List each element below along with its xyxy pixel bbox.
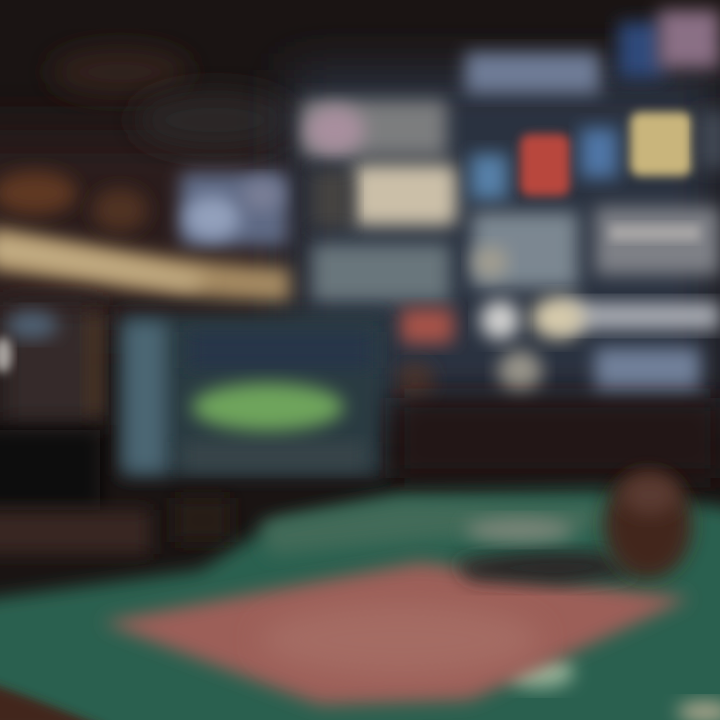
panel: warm lit bar on the left [0, 171, 290, 425]
panel: green table [0, 490, 720, 720]
panel: dark floor band [0, 398, 720, 554]
icon: green playing field [192, 383, 344, 431]
panel: large monitor with green field [120, 314, 385, 476]
icon: football and shadow [455, 471, 692, 585]
panel: wall of screens [180, 10, 720, 402]
chart: red felt betting layout [102, 562, 690, 705]
